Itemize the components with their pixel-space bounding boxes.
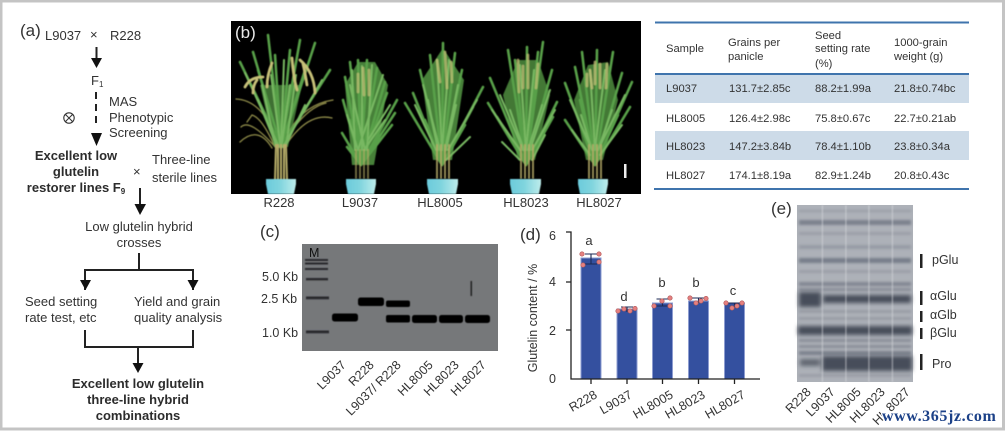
photo background xyxy=(231,21,641,194)
table header xyxy=(666,30,948,70)
band names: αGlb xyxy=(930,308,957,322)
hybrid crosses text: Low glutelin hybrid xyxy=(85,219,193,234)
arrow to F1 xyxy=(91,47,102,68)
significance letters: d xyxy=(620,289,628,304)
y tick labels: 4 xyxy=(549,275,556,289)
final combinations text xyxy=(72,376,204,423)
significance letters xyxy=(585,233,737,304)
panel label e: (e) xyxy=(771,199,792,218)
band names: αGlu xyxy=(930,289,957,303)
yield text xyxy=(134,294,223,325)
F1 label: F xyxy=(91,73,99,88)
sterile lines text xyxy=(152,152,218,185)
table row HL8027 xyxy=(666,170,950,182)
seed setting text: Seed setting xyxy=(25,294,97,309)
screening text xyxy=(109,94,174,140)
table header: weight (g) xyxy=(893,51,943,63)
significance letters: a xyxy=(585,233,593,248)
band markers xyxy=(920,254,922,370)
error bars xyxy=(585,254,740,312)
x tick labels xyxy=(567,388,748,422)
yield text: quality analysis xyxy=(134,310,223,325)
gel image xyxy=(302,244,498,351)
table row HL8005: HL8005 xyxy=(666,113,705,125)
table row HL8027: 20.8±0.43c xyxy=(894,170,950,182)
selfing symbol xyxy=(64,113,74,123)
screening text: MAS xyxy=(109,94,138,109)
size labels: 1.0 Kb xyxy=(262,326,298,340)
table row L9037: L9037 xyxy=(666,83,697,95)
table header: Seed xyxy=(815,30,841,42)
table row L9037: 21.8±0.74bc xyxy=(894,83,956,95)
x tick labels: L9037 xyxy=(597,388,635,417)
marker lane xyxy=(305,259,329,333)
y tick labels: 2 xyxy=(549,324,556,338)
lane labels: HL8027 xyxy=(448,358,489,399)
hybrid crosses text xyxy=(85,219,193,250)
panel e: protein gel xyxy=(771,199,958,428)
table row HL8023: 78.4±1.10b xyxy=(815,141,871,153)
seed setting text xyxy=(25,294,97,325)
plant names: HL8023 xyxy=(503,195,549,210)
panel c: agarose gel xyxy=(260,222,498,418)
table row HL8005: 22.7±0.21ab xyxy=(894,113,956,125)
x tick labels: R228 xyxy=(567,388,600,415)
sterile lines text: sterile lines xyxy=(152,170,218,185)
restorer lines text: glutelin xyxy=(53,164,99,179)
parents cross: L9037 xyxy=(45,28,81,43)
significance letters: c xyxy=(730,283,737,298)
table row HL8005 xyxy=(666,113,956,125)
significance letters: b xyxy=(658,275,666,290)
table of yield traits xyxy=(654,22,969,190)
table header: setting rate xyxy=(815,43,870,55)
panel a: breeding flowchart xyxy=(20,21,223,423)
lane labels: HL8005 xyxy=(395,358,436,399)
panel label d: (d) xyxy=(520,225,541,244)
x tick labels: HL8023 xyxy=(663,388,708,422)
table row HL8005: 126.4±2.98c xyxy=(729,113,791,125)
axes xyxy=(566,232,760,384)
lane labels: R228 xyxy=(783,385,814,416)
bars xyxy=(581,258,744,379)
table row L9037: 88.2±1.99a xyxy=(815,83,872,95)
plant HL8027 xyxy=(565,50,632,178)
lane labels xyxy=(314,358,489,418)
final combinations text: three-line hybrid xyxy=(87,392,189,407)
restorer lines text xyxy=(27,148,126,196)
size labels: 2.5 Kb xyxy=(261,292,297,306)
lane labels: L9037/ R228 xyxy=(343,358,404,418)
branching arrows xyxy=(80,253,198,290)
panel label c: (c) xyxy=(260,222,280,241)
table row HL8027: 174.1±8.19a xyxy=(729,170,792,182)
hybrid crosses text: crosses xyxy=(117,235,162,250)
final combinations text: combinations xyxy=(96,408,180,423)
restorer lines text: 9 xyxy=(121,187,126,196)
y tick labels xyxy=(549,229,556,386)
seed setting text: rate test, etc xyxy=(25,310,97,325)
screening text: Phenotypic xyxy=(109,110,174,125)
yield text: Yield and grain xyxy=(134,294,220,309)
plant HL8005 xyxy=(405,43,483,178)
flower pots xyxy=(266,179,608,194)
table row HL8023 xyxy=(666,141,951,153)
watermark: www.365jz.com xyxy=(882,408,997,425)
plant HL8023 xyxy=(488,42,557,178)
lane labels: HL8023 xyxy=(421,358,462,399)
table header: Grains per xyxy=(728,37,781,49)
table header: 1000-grain xyxy=(894,37,948,49)
panel d: glutelin bar chart xyxy=(520,225,760,422)
table row HL8027: HL8027 xyxy=(666,170,705,182)
band names: Pro xyxy=(932,357,952,371)
final combinations text: Excellent low glutelin xyxy=(72,376,204,391)
dashed arrow xyxy=(91,92,102,146)
plant names: R228 xyxy=(263,195,295,210)
panel label a: (a) xyxy=(20,21,41,40)
band names xyxy=(930,253,958,371)
screening text: Screening xyxy=(109,125,168,140)
gel bands xyxy=(332,281,490,323)
lane labels: HL8023 xyxy=(847,385,888,426)
plant names: HL8027 xyxy=(576,195,622,210)
lane labels: HL8005 xyxy=(823,385,864,426)
y axis title: Glutelin content / % xyxy=(526,264,540,372)
table row L9037 xyxy=(666,83,956,95)
parents cross: × xyxy=(90,27,98,42)
plant names: L9037 xyxy=(342,195,378,210)
parents cross xyxy=(45,27,141,43)
table rules xyxy=(654,22,969,190)
x tick labels: HL8005 xyxy=(631,388,676,422)
scale bar xyxy=(624,164,626,178)
parents cross: R228 xyxy=(110,28,141,43)
plant names: HL8005 xyxy=(417,195,463,210)
merging arrow xyxy=(85,330,193,373)
lane labels: L9037 xyxy=(803,385,838,419)
panel label b: (b) xyxy=(235,23,256,42)
table header: Sample xyxy=(666,43,704,55)
table stripes xyxy=(655,75,969,160)
table header: panicle xyxy=(728,51,763,63)
table row HL8005: 75.8±0.67c xyxy=(815,113,871,125)
cross symbol: × xyxy=(133,164,141,179)
restorer lines text: Excellent low xyxy=(35,148,118,163)
restorer lines text: restorer lines F xyxy=(27,180,121,195)
band names: pGlu xyxy=(932,253,958,267)
plant L9037 xyxy=(342,60,397,178)
lane labels: HL 8027 xyxy=(870,385,913,428)
table row HL8023: HL8023 xyxy=(666,141,705,153)
plant names xyxy=(263,195,622,210)
lane labels xyxy=(783,385,913,428)
significance letters: b xyxy=(692,275,700,290)
lane gaps xyxy=(822,205,893,382)
table row HL8023: 147.2±3.84b xyxy=(729,141,791,153)
marker label M: M xyxy=(309,246,319,260)
lane labels: L9037 xyxy=(314,358,349,392)
y tick labels: 0 xyxy=(549,372,556,386)
size labels xyxy=(261,270,298,340)
lane labels: R228 xyxy=(346,358,377,389)
size labels: 5.0 Kb xyxy=(262,270,298,284)
table row HL8023: 23.8±0.34a xyxy=(894,141,951,153)
y tick labels: 6 xyxy=(549,229,556,243)
table header: (%) xyxy=(815,58,833,70)
panel b: plant photo xyxy=(231,21,641,210)
arrow to hybrid crosses xyxy=(134,188,146,215)
band names: βGlu xyxy=(930,326,957,340)
sterile lines text: Three-line xyxy=(152,152,211,167)
data points xyxy=(580,252,744,313)
table row HL8027: 82.9±1.24b xyxy=(815,170,871,182)
gel image xyxy=(797,205,913,382)
gel background bands xyxy=(799,210,911,377)
gel major bands xyxy=(798,292,912,371)
table row L9037: 131.7±2.85c xyxy=(729,83,791,95)
plant R228 xyxy=(236,35,333,180)
F1 label: 1 xyxy=(99,80,104,89)
x tick labels: HL8027 xyxy=(703,388,748,422)
